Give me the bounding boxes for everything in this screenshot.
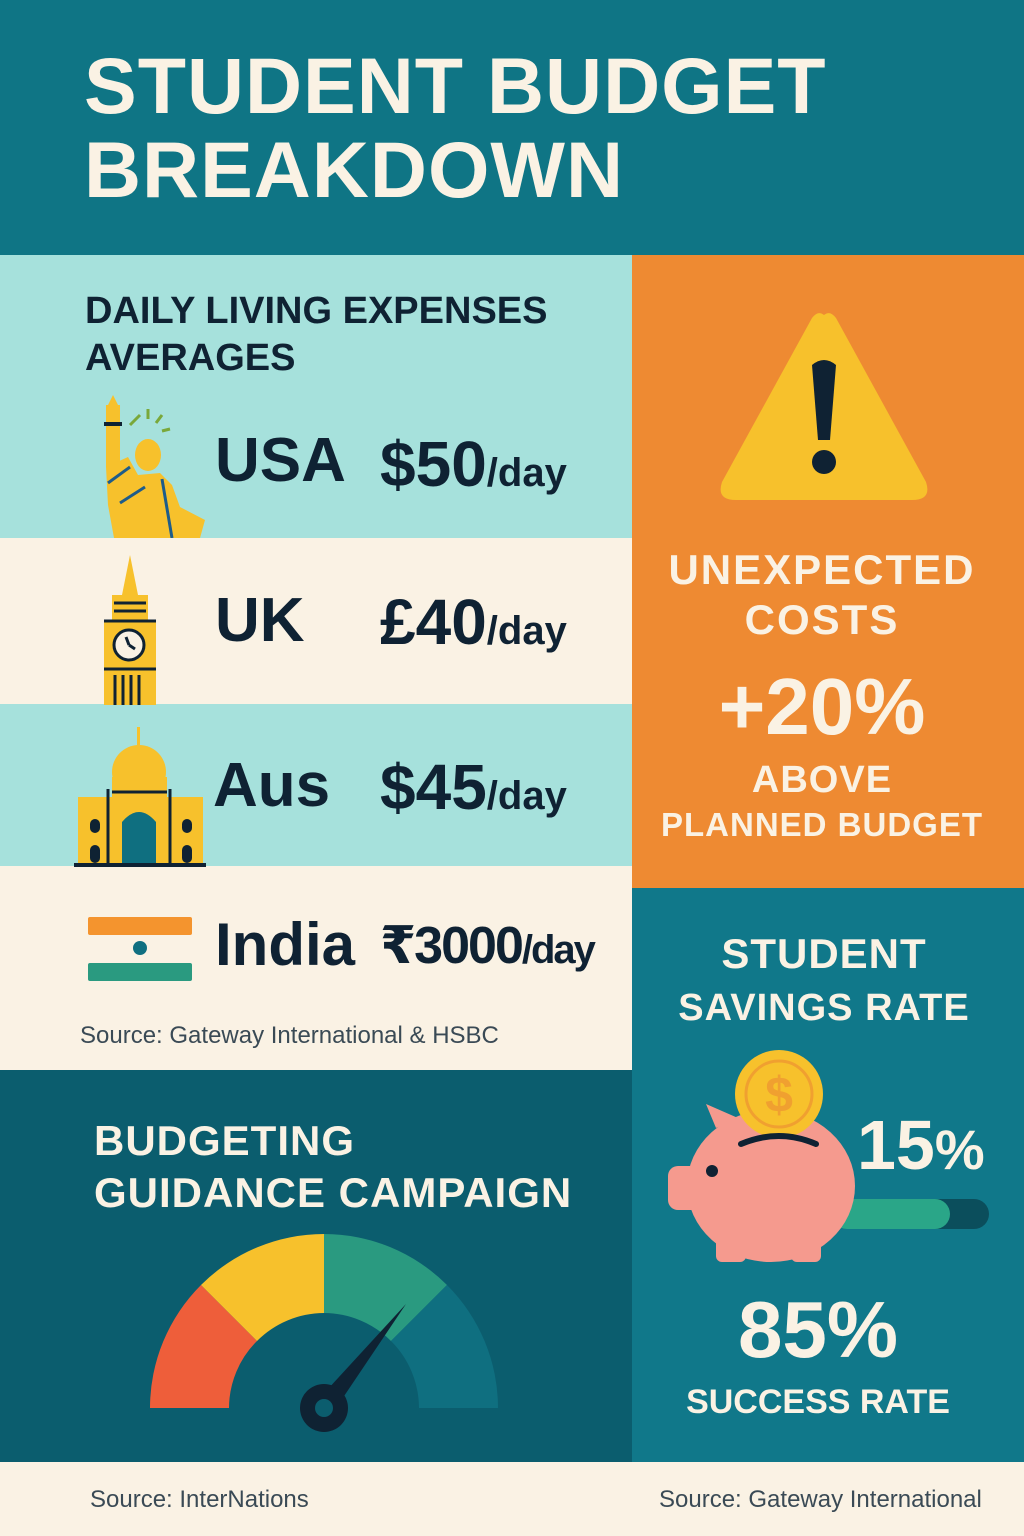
title <box>84 41 827 214</box>
text: above planned budget: PLANNED BUDGET <box>661 806 983 843</box>
heading: student savings rate <box>678 930 970 1029</box>
heading: daily living expenses: AVERAGES <box>85 337 295 379</box>
icon: india flag <box>88 917 192 981</box>
panel: unexpected costs <box>632 255 1024 888</box>
source: internations: Source: InterNations <box>90 1486 309 1513</box>
row: India: ₹3000/day <box>380 917 594 975</box>
heading: daily living expenses <box>85 290 547 379</box>
title: BREAKDOWN <box>84 125 624 214</box>
row: UK: UK <box>215 586 305 655</box>
text: above planned budget: ABOVE <box>752 759 892 801</box>
icon: big ben <box>104 555 156 705</box>
footer <box>0 1462 1024 1536</box>
row: Aus: Aus <box>213 751 330 820</box>
text: success rate: SUCCESS RATE <box>686 1383 950 1421</box>
heading: student savings rate: STUDENT <box>721 930 927 977</box>
heading: budgeting guidance campaign: GUIDANCE CAMPAIGN <box>94 1169 572 1216</box>
heading: daily living expenses: DAILY LIVING EXPENSES <box>85 290 547 332</box>
text: unexpected costs: COSTS <box>745 596 899 643</box>
heading: student savings rate: SAVINGS RATE <box>678 987 970 1029</box>
panel: daily living expenses <box>0 255 632 1049</box>
text: above planned budget <box>661 759 983 843</box>
title: STUDENT BUDGET <box>84 41 827 130</box>
text: unexpected costs: UNEXPECTED <box>668 546 976 593</box>
panel: budgeting guidance campaign <box>0 1070 632 1462</box>
row: Aus <box>213 751 567 823</box>
icon: piggy bank with coin <box>668 1050 855 1262</box>
stat: 85%: 85% <box>738 1285 898 1374</box>
row: UK <box>215 586 567 658</box>
icon: taj mahal <box>74 727 206 867</box>
progress bar <box>841 1199 989 1229</box>
icon: statue of liberty <box>104 395 205 538</box>
text: unexpected costs <box>668 546 976 643</box>
stat: +20%: +20% <box>719 662 925 751</box>
row: USA <box>215 426 567 500</box>
stat: 15%: 15% <box>857 1106 985 1184</box>
icon: warning triangle <box>720 313 928 500</box>
heading: budgeting guidance campaign: BUDGETING <box>94 1117 355 1164</box>
row: USA: $50/day <box>380 428 567 500</box>
row: India <box>215 911 596 978</box>
icon: piggy bank with coin: $ <box>765 1067 793 1123</box>
header <box>0 0 1024 255</box>
panel: student savings rate <box>632 888 1024 1462</box>
row: Aus: $45/day <box>380 751 567 823</box>
source: gateway international: Source: Gateway International <box>659 1486 982 1513</box>
row: India: India <box>215 911 355 978</box>
heading: budgeting guidance campaign <box>94 1117 572 1216</box>
row: UK: £40/day <box>380 586 567 658</box>
chart: gauge <box>150 1234 498 1432</box>
row: USA: USA <box>215 426 346 495</box>
source: gateway & hsbc: Source: Gateway International & HSBC <box>80 1022 499 1049</box>
